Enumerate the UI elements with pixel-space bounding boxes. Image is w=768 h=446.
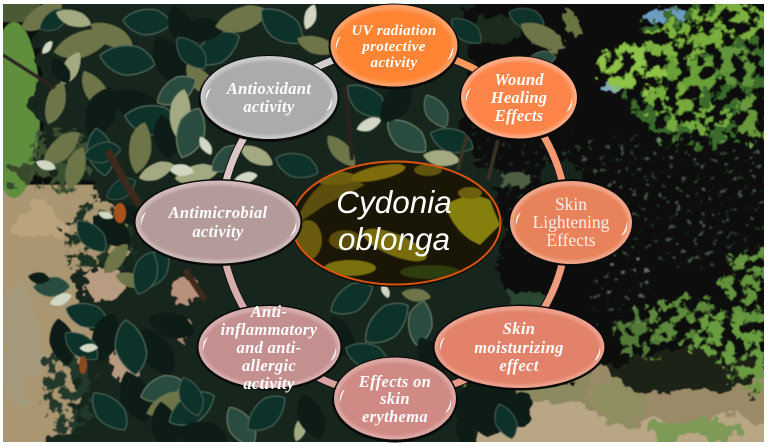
node: Antimicrobial activity: activity: [192, 222, 244, 241]
node: Anti-inflammatory and anti-allergic activity: [196, 302, 342, 393]
connector: antioxidant to UV radiation: [315, 55, 350, 68]
node: Skin moisturizing effect: moisturizing: [474, 338, 564, 357]
node: UV radiation protective activity: protective: [360, 39, 426, 55]
node: Wound Healing Effects: Healing: [490, 88, 547, 107]
node: Anti-inflammatory and anti-allergic activity: allergic: [242, 356, 296, 375]
node: Skin Lightening Effects: Skin: [555, 194, 587, 214]
branches: [3, 55, 55, 88]
centre title: oblonga: [338, 221, 450, 257]
centre oval: Cydonia oblonga: [290, 160, 502, 287]
node: Skin moisturizing effect: effect: [499, 356, 539, 375]
node: Wound Healing Effects: [460, 56, 578, 142]
tan gaps between branches: [85, 269, 198, 382]
connector: UV radiation to wound healing: [440, 55, 480, 72]
node: Effects on skin erythema: Effects on: [358, 372, 431, 391]
node: Wound Healing Effects: Wound: [494, 70, 544, 89]
connector: skin lightening to moisturizing: [540, 250, 565, 315]
node: Skin Lightening Effects: Lightening: [533, 212, 610, 232]
bright green tree top right: [604, 8, 687, 93]
node: UV radiation protective activity: UV radiation: [351, 23, 437, 39]
node: Anti-inflammatory and anti-allergic activity: Anti-: [250, 302, 287, 321]
centre title: [336, 184, 452, 257]
ring connectors: [224, 55, 565, 388]
node: Antimicrobial activity: Antimicrobial: [168, 203, 268, 222]
node: Anti-inflammatory and anti-allergic activity: inflammatory: [221, 320, 318, 339]
dark foliage highlights right: [575, 135, 765, 270]
node: Skin moisturizing effect: Skin: [503, 319, 535, 338]
connector: erythema to anti-inflammatory: [310, 373, 345, 388]
node: Effects on skin erythema: [332, 356, 458, 442]
node: Antioxidant activity: [198, 55, 340, 142]
quince tree canopy mass: [34, 0, 528, 446]
node: Antioxidant activity: Antioxidant: [226, 79, 311, 98]
node: Effects on skin erythema: erythema: [362, 407, 428, 426]
node: Skin Lightening Effects: Effects: [546, 230, 596, 250]
connector: wound healing to skin lightening: [538, 127, 565, 195]
node: Skin moisturizing effect: [432, 304, 606, 390]
quince leaves: [16, 0, 568, 446]
connector: anti-inflammatory to antimicrobial: [224, 255, 250, 318]
node: Skin Lightening Effects: [508, 179, 634, 266]
connector: moisturizing to erythema: [445, 372, 480, 387]
node: UV radiation protective activity: activity: [371, 55, 417, 71]
node: Effects on skin erythema: skin: [379, 389, 410, 408]
node: Antioxidant activity: activity: [243, 97, 295, 116]
node: UV radiation protective activity: [328, 4, 460, 90]
node: Anti-inflammatory and anti-allergic activity: activity: [243, 374, 295, 393]
node: Antimicrobial activity: [134, 179, 302, 266]
connector: antimicrobial to antioxidant: [224, 128, 250, 190]
centre title: Cydonia: [336, 184, 452, 220]
node: Wound Healing Effects: Effects: [494, 106, 543, 125]
orange leaves: [79, 203, 126, 374]
node: Anti-inflammatory and anti-allergic activity: and anti-: [236, 338, 302, 357]
